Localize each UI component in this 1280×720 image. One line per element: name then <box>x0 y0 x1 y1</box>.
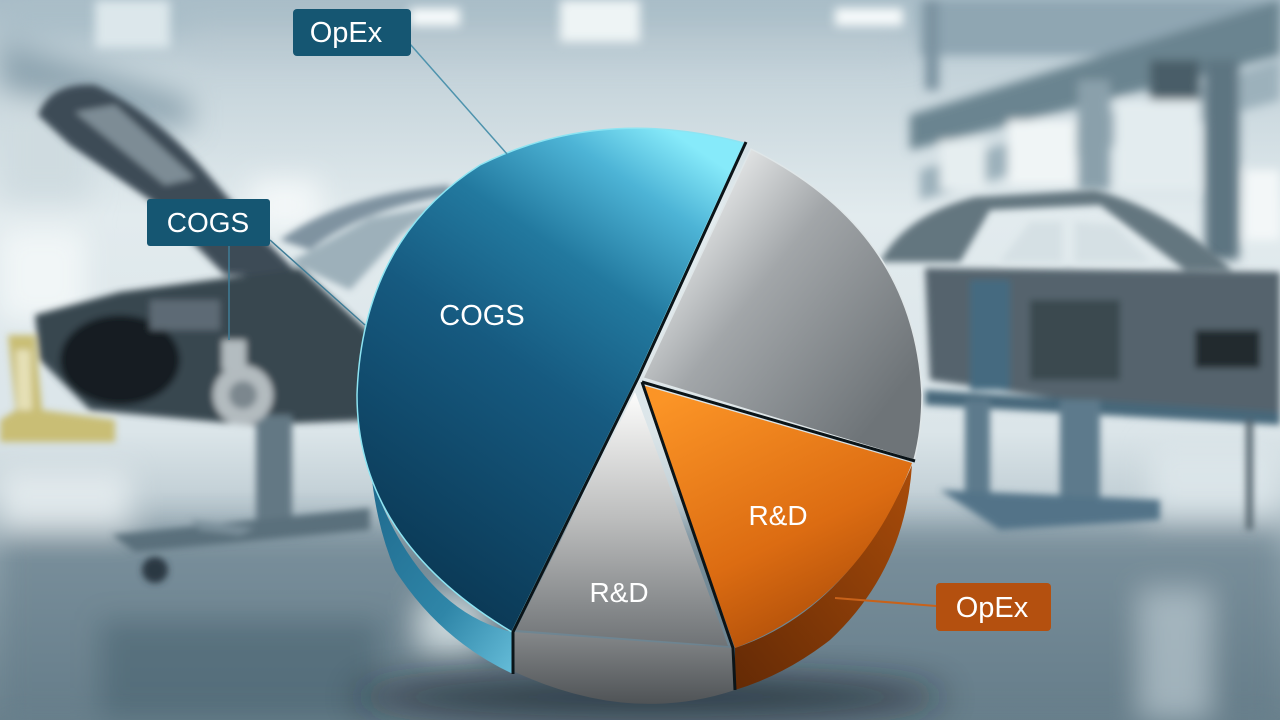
slice separators <box>513 142 915 690</box>
callout: COGS left <box>147 199 365 340</box>
pie side: blue extrusion <box>372 480 513 674</box>
background: right car frame <box>880 190 1280 530</box>
pie ground shadow <box>355 677 945 717</box>
slice: R&D grey <box>516 392 728 646</box>
label: R&D grey: R&D <box>589 577 649 608</box>
slice: R&D orange <box>642 385 912 648</box>
label: COGS: COGS <box>439 300 525 332</box>
callout: OpEx top <box>293 9 507 154</box>
slice: grey upper right <box>643 149 922 460</box>
callout: OpEx orange: OpEx <box>956 592 1029 624</box>
callout: COGS left: COGS <box>167 207 249 238</box>
background: left car on lift <box>0 85 450 583</box>
pie side: orange extrusion <box>735 465 912 690</box>
slice: COGS blue <box>357 128 744 632</box>
pie chart <box>357 128 922 704</box>
pie side: grey extrusion <box>514 632 735 704</box>
label: R&D orange: R&D <box>748 500 808 531</box>
callout: OpEx orange <box>835 583 1051 631</box>
callout: OpEx top: OpEx <box>310 17 383 49</box>
